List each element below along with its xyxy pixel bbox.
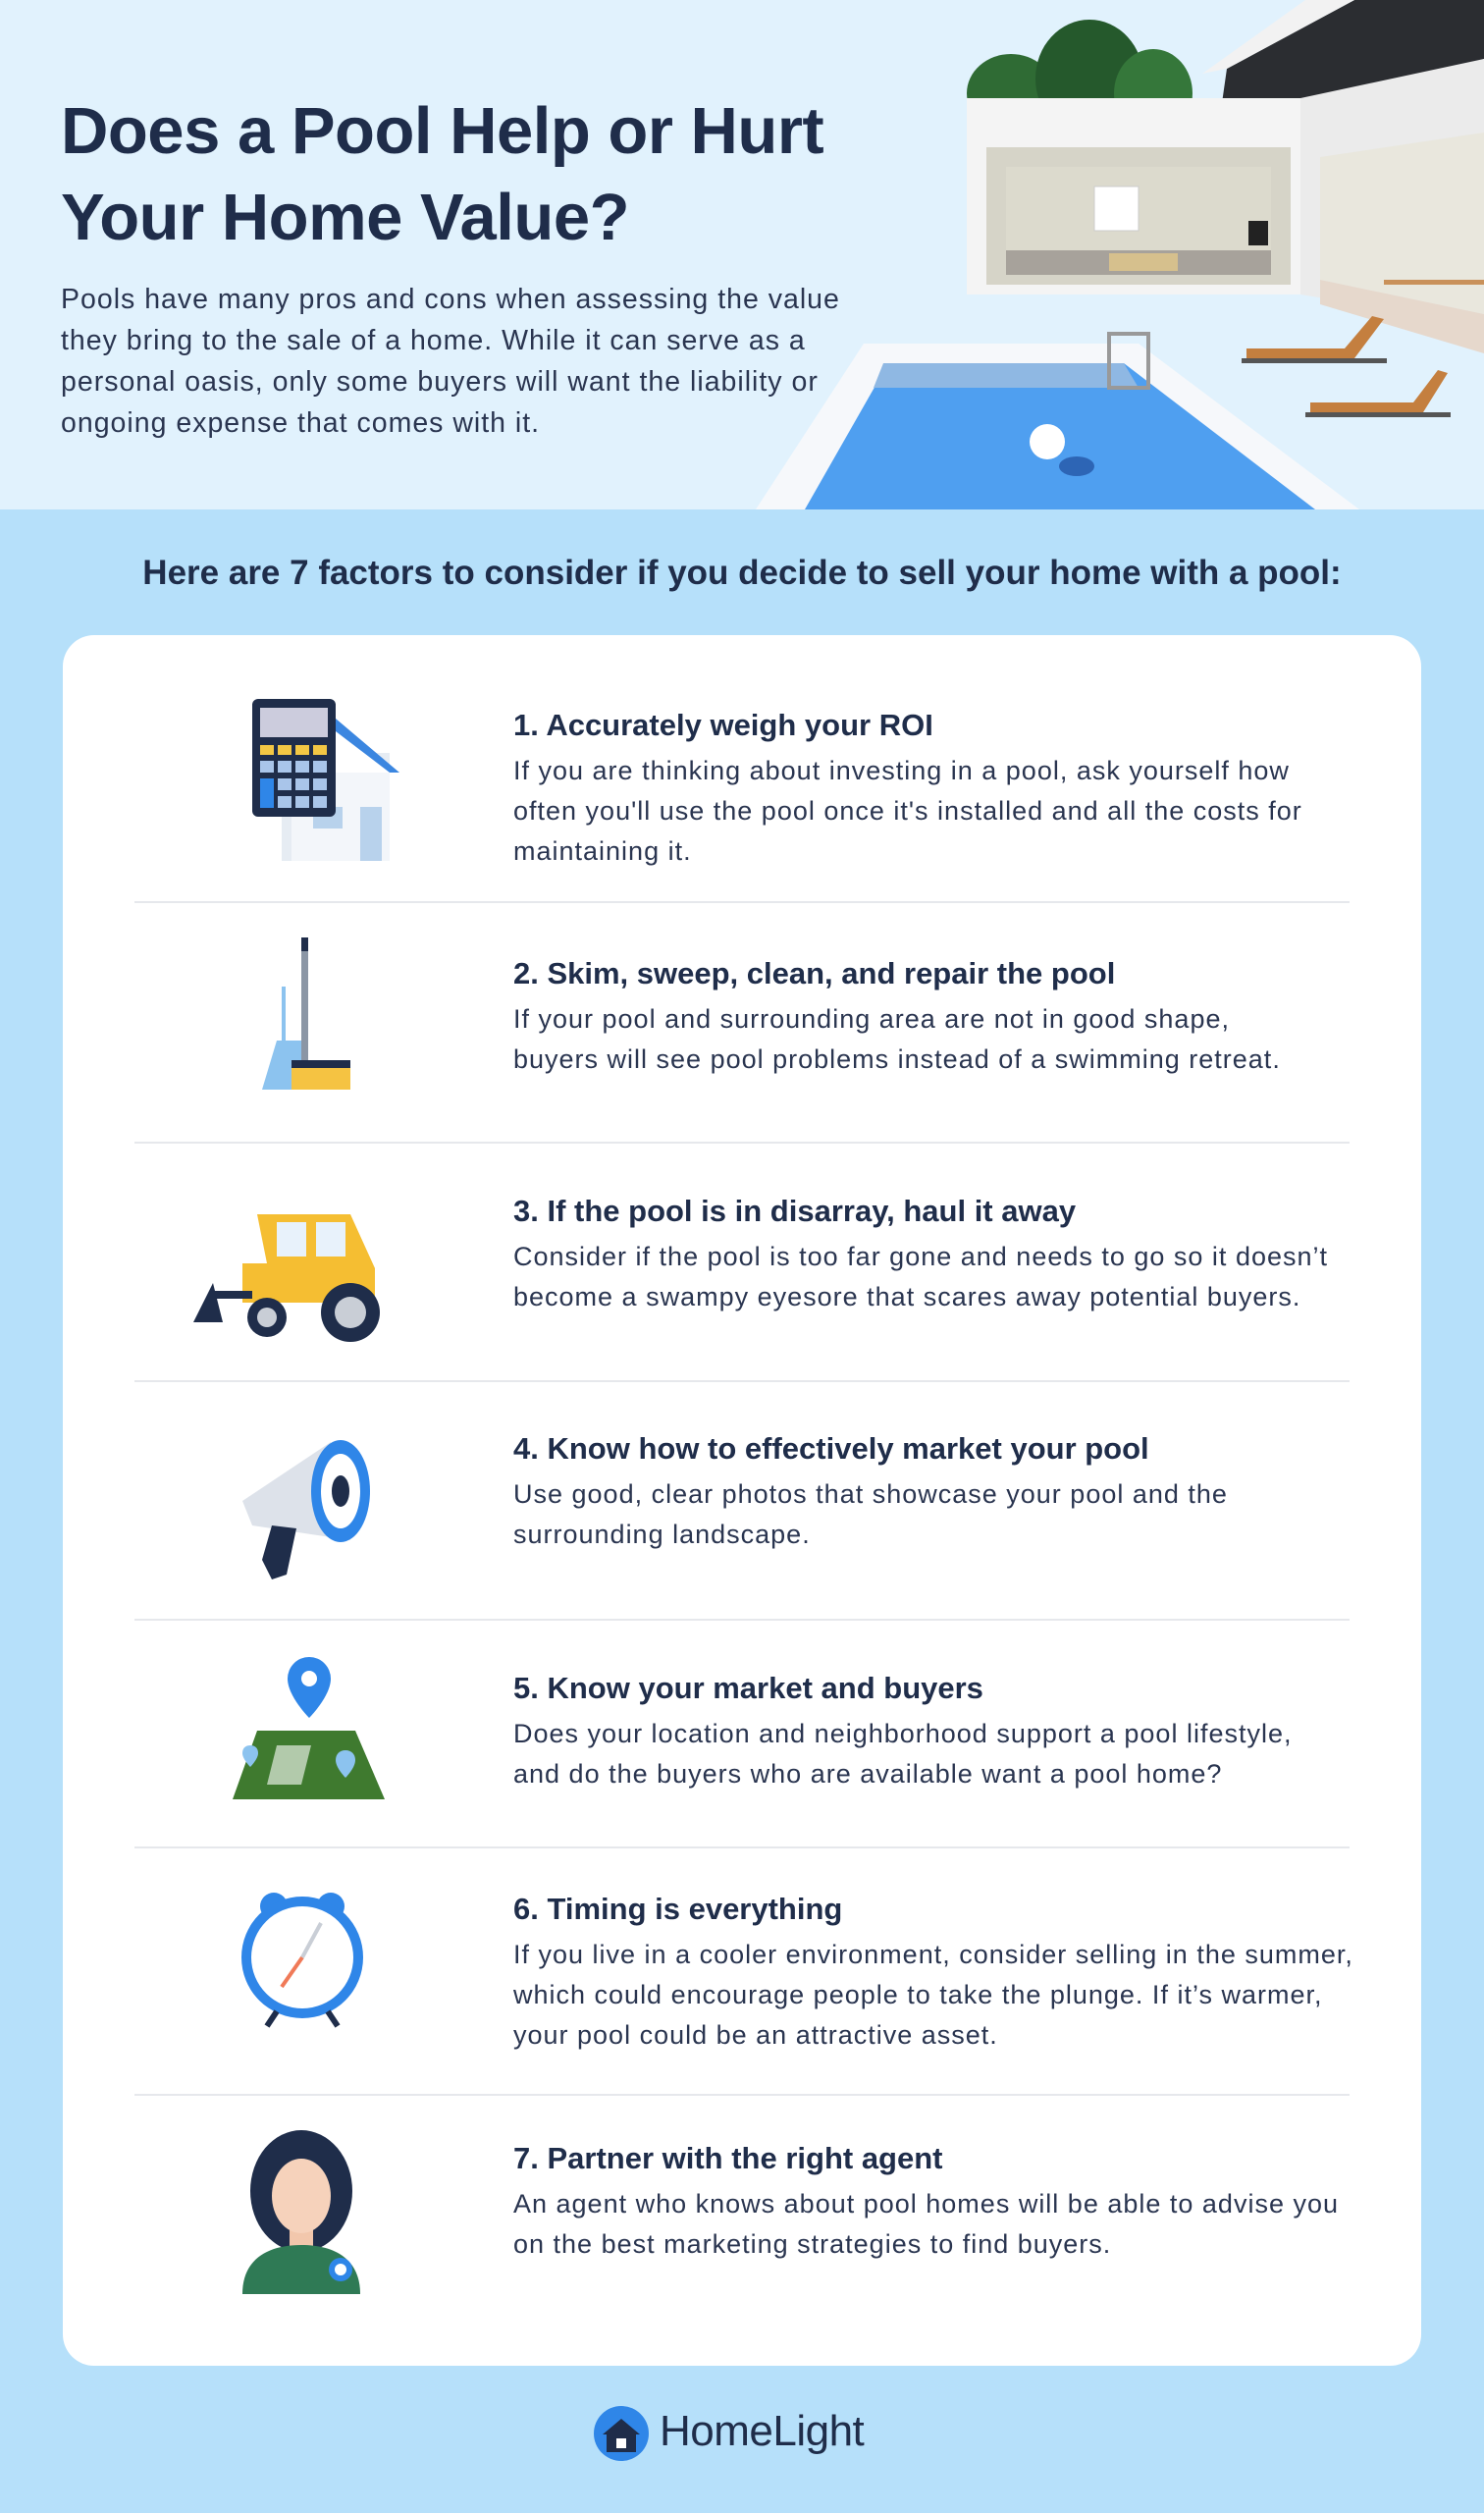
text 4 <box>513 1479 1228 1549</box>
heading 2: 2. Skim, sweep, clean, and repair the pool <box>513 956 1115 990</box>
icon: logo mark <box>594 2406 649 2461</box>
text 4: surrounding landscape. <box>513 1520 811 1549</box>
logo text: HomeLight <box>660 2407 864 2455</box>
item 2 <box>262 937 1281 1090</box>
text 7: An agent who knows about pool homes will be able to advise you <box>513 2189 1339 2219</box>
text 4: Use good, clear photos that showcase your pool and the <box>513 1479 1228 1509</box>
icon: bulldozer <box>193 1214 380 1342</box>
intro paragraph: ongoing expense that comes with it. <box>61 407 540 439</box>
heading 5: 5. Know your market and buyers <box>513 1671 983 1705</box>
text 3: become a swampy eyesore that scares away potential buyers. <box>513 1282 1300 1311</box>
text 5: Does your location and neighborhood support a pool lifestyle, <box>513 1719 1292 1748</box>
heading 3: 3. If the pool is in disarray, haul it away <box>513 1194 1076 1228</box>
intro paragraph: Pools have many pros and cons when assessing the value <box>61 284 840 315</box>
text 2: buyers will see pool problems instead of a swimming retreat. <box>513 1044 1281 1074</box>
icon: calculator and house <box>252 699 399 861</box>
item 1 <box>252 699 1302 866</box>
intro paragraph: they bring to the sale of a home. While it can serve as a <box>61 325 806 356</box>
text 5: and do the buyers who are available want a pool home? <box>513 1759 1222 1789</box>
header background <box>0 0 1484 509</box>
text 1: often you'll use the pool once it's installed and all the costs for <box>513 796 1302 826</box>
text 2 <box>513 1004 1281 1074</box>
item 7 <box>242 2130 1339 2294</box>
item 5 <box>233 1657 1292 1799</box>
illustration: house and pool <box>756 0 1484 509</box>
text 6: which could encourage people to take the plunge. If it’s warmer, <box>513 1980 1322 2009</box>
intro paragraph <box>61 284 840 439</box>
text 6: If you live in a cooler environment, consider selling in the summer, <box>513 1940 1353 1969</box>
text 6: your pool could be an attractive asset. <box>513 2020 998 2050</box>
text 1 <box>513 756 1302 866</box>
text 3 <box>513 1242 1328 1311</box>
icon: megaphone <box>242 1440 370 1579</box>
icon: map pin <box>233 1657 385 1799</box>
text 7 <box>513 2189 1339 2259</box>
heading 1: 1. Accurately weigh your ROI <box>513 708 933 742</box>
subheading: Here are 7 factors to consider if you decide to sell your home with a pool: <box>142 554 1342 592</box>
text 3: Consider if the pool is too far gone and needs to go so it doesn’t <box>513 1242 1328 1271</box>
heading 7: 7. Partner with the right agent <box>513 2141 942 2175</box>
title: Your Home Value? <box>61 181 629 254</box>
text 6 <box>513 1940 1353 2050</box>
title: Does a Pool Help or Hurt <box>61 94 823 168</box>
text 2: If your pool and surrounding area are not in good shape, <box>513 1004 1230 1034</box>
heading 6: 6. Timing is everything <box>513 1892 842 1926</box>
panel: factors card <box>63 635 1421 2366</box>
text 7: on the best marketing strategies to find buyers. <box>513 2229 1111 2259</box>
item 3 <box>193 1194 1328 1342</box>
icon: broom and dustpan <box>262 937 350 1090</box>
text 1: maintaining it. <box>513 836 692 866</box>
icon: alarm clock <box>241 1893 363 2028</box>
title <box>61 94 823 254</box>
text 5 <box>513 1719 1292 1789</box>
text 1: If you are thinking about investing in a pool, ask yourself how <box>513 756 1290 785</box>
intro paragraph: personal oasis, only some buyers will want the liability or <box>61 366 819 398</box>
item 4 <box>242 1431 1228 1579</box>
icon: agent <box>242 2130 360 2294</box>
heading 4: 4. Know how to effectively market your pool <box>513 1431 1149 1466</box>
logo: HomeLight <box>594 2406 864 2461</box>
item 6 <box>241 1892 1353 2050</box>
